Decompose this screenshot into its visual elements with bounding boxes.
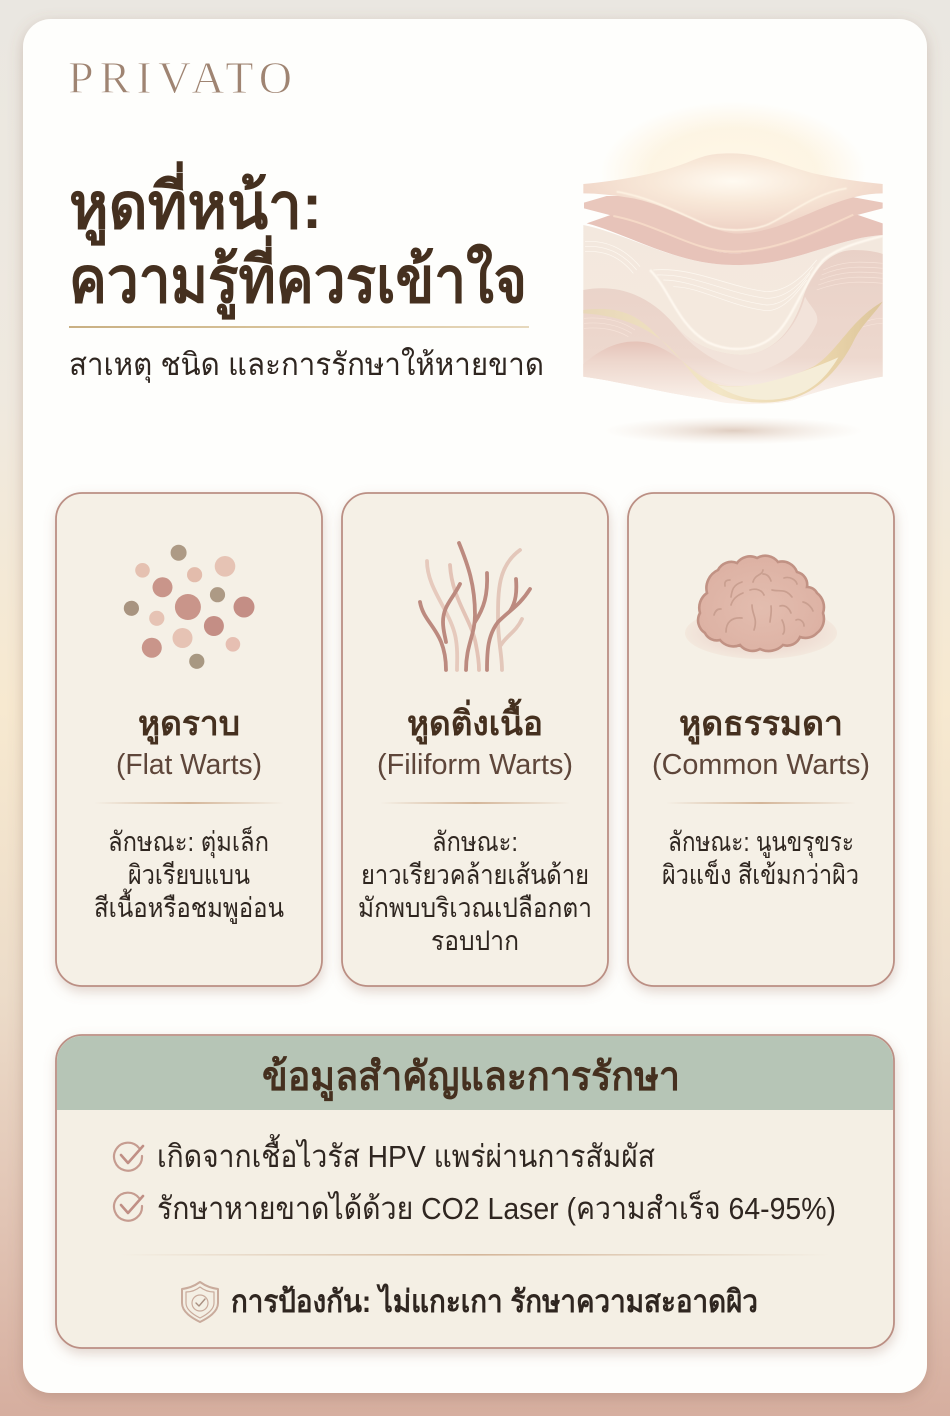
panel: key information and treatment [56,1035,894,1348]
card description: ผิวเรียบแบน [128,860,250,890]
panel: common warts [628,493,894,986]
card subtitle: (Common Warts) [652,749,870,781]
icon: cauliflower wart [685,556,837,659]
icon: check 2 [114,1193,143,1221]
bullet text 2: รักษาหายขาดได้ด้วย CO2 Laser (ความสำเร็จ 64-95%) [157,1190,836,1226]
panel: flat warts [56,493,322,986]
card description: สีเนื้อหรือชมพูอ่อน [94,888,284,924]
title [69,161,527,320]
card heading: หูดธรรมดา [679,705,843,745]
card heading: หูดราบ [138,705,240,745]
card description: มักพบบริเวณเปลือกตา [358,893,592,923]
card description: รอบปาก [431,926,519,956]
icon: check 1 [114,1143,143,1171]
card description [662,827,859,890]
card heading: หูดติ่งเนื้อ [407,698,543,745]
icon: shield [182,1282,218,1322]
hero illustration: skin layers [583,102,883,445]
fine wave lines [585,241,817,311]
panel header band [57,1036,893,1110]
card description: ลักษณะ: ตุ่มเล็ก [108,824,269,859]
panel: filiform warts [342,493,608,986]
card description: ผิวแข็ง สีเข้มกว่าผิว [662,857,859,890]
title: หูดที่หน้า: [69,161,322,246]
card description [358,827,592,956]
title: ความรู้ที่ควรเข้าใจ [69,235,527,320]
bullet text 1: เกิดจากเชื้อไวรัส HPV แพร่ผ่านการสัมผัส [157,1134,655,1174]
icon: scattered flat dots [124,545,255,669]
subtitle: สาเหตุ ชนิด และการรักษาให้หายขาด [69,347,544,384]
card description: ลักษณะ: นูนขรุขระ [668,827,854,859]
card description: ลักษณะ: [432,827,518,857]
brand logo: PRIVATO [68,52,292,103]
card description: ยาวเรียวคล้ายเส้นด้าย [361,860,589,890]
card subtitle: (Flat Warts) [116,749,262,781]
card subtitle: (Filiform Warts) [377,749,573,781]
card description [94,824,284,924]
icon: thread-like filaments [420,543,530,670]
panel heading: ข้อมูลสำคัญและการรักษา [262,1055,680,1101]
prevention note: การป้องกัน: ไม่แกะเกา รักษาความสะอาดผิว [231,1283,758,1319]
title rule [69,326,529,328]
